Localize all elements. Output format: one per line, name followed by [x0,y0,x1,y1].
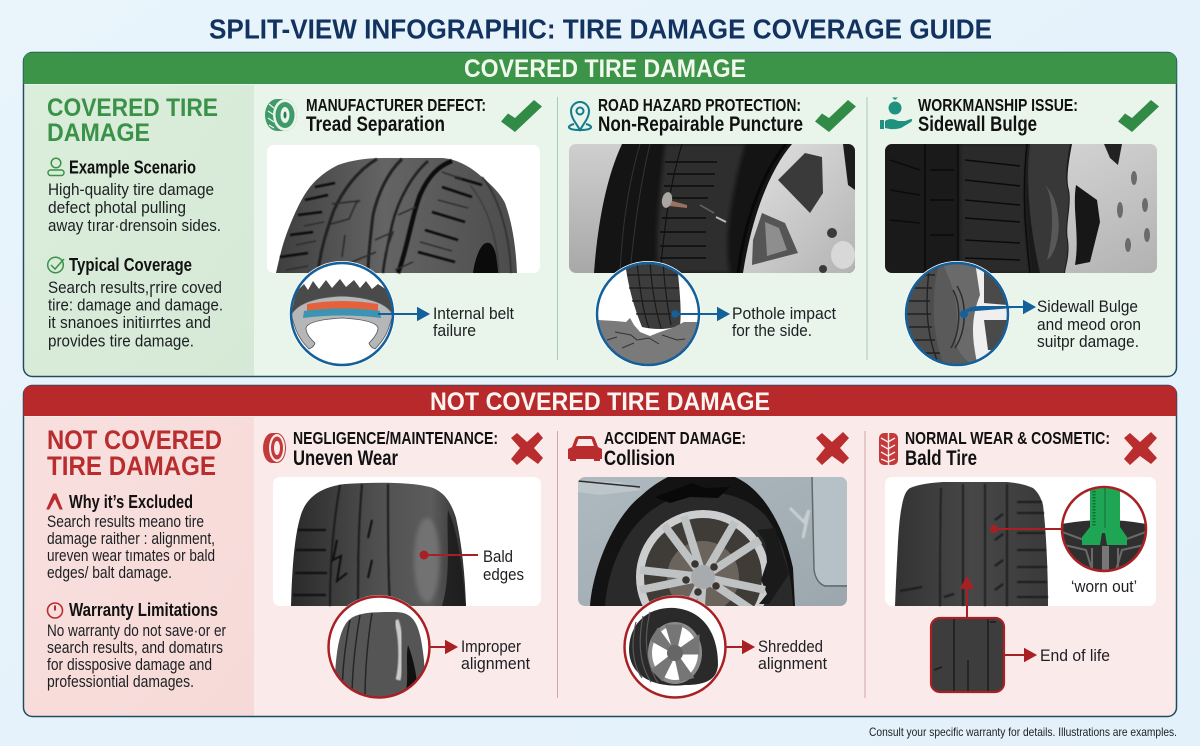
icon: check circle [48,257,64,273]
arrow: up to tread [962,578,972,617]
warranty limitations text: search results, and domatırs [47,639,223,657]
title: SPLIT-VIEW INFOGRAPHIC: TIRE DAMAGE COVERAGE GUIDE [209,14,992,44]
marker line: tread depth [990,525,1064,533]
card heading: Non-Repairable Puncture [598,113,803,136]
card heading: ROAD HAZARD PROTECTION: [598,95,801,115]
why excluded text: damage raither : alignment, [47,530,215,548]
covered sidebar heading: COVERED TIRE [47,94,218,122]
icon: check mark [1118,100,1159,132]
card heading: Uneven Wear [293,447,398,470]
column: road hazard [569,95,860,370]
photo: bald tire [885,477,1156,606]
callout: internal belt failure [433,304,514,340]
covered sidebar heading: DAMAGE [47,119,150,147]
callout: improper alignment [461,637,530,673]
icon: clock warning [48,603,62,618]
example scenario text [48,181,221,235]
column: manufacturer defect [265,95,542,367]
icon: person [48,158,64,176]
example scenario text: away tırar·drensoin sides. [48,217,221,235]
arrow: shredded alignment [725,642,753,652]
column: normal wear [879,428,1157,692]
callout: pothole impact [732,304,836,340]
covered header text: COVERED TIRE DAMAGE [464,55,746,83]
warranty limitations text [47,622,226,691]
icon: red cross [816,432,849,465]
card heading: NORMAL WEAR & COSMETIC: [905,428,1110,448]
marker line: bald edges [420,550,478,560]
callout: bald edges [483,547,524,584]
callout: sidewall bulge: suitpr damage. [1037,332,1139,351]
photo: tread separation tire [267,145,540,273]
warranty limitations heading: Warranty Limitations [69,600,218,620]
icon: check mark [815,100,856,132]
callout: shredded alignment: alignment [758,654,827,673]
warranty limitations text: professiontial damages. [47,673,194,691]
card heading: NEGLIGENCE/MAINTENANCE: [293,428,498,448]
callout: internal belt failure: failure [433,321,476,340]
icon: map pin [569,102,591,130]
typical coverage text [48,279,223,350]
inset: worn tread close-up [931,618,1004,692]
example scenario text: defect photal pulling [48,199,186,217]
card heading [604,428,746,470]
why excluded text [47,513,215,582]
icon: red cross [511,432,543,465]
icon: red tire [263,433,286,463]
photo: sidewall bulge [885,144,1157,273]
panel: covered tire damage [24,52,1176,376]
why excluded text: Search results meano tire [47,513,204,531]
card heading [905,428,1110,470]
panel: not covered tire damage [24,386,1176,716]
inset: improper alignment [327,595,431,700]
warranty limitations text: No warranty do not save·or er [47,622,226,640]
card heading: Collision [604,447,675,470]
inset: pothole impact [595,261,701,370]
callout: improper alignment: alignment [461,654,530,673]
card heading: MANUFACTURER DEFECT: [306,95,486,115]
arrow: pothole [675,308,728,320]
callout: pothole impact: for the side. [732,321,812,340]
photo: uneven wear tire [273,477,541,606]
callout: shredded alignment: Shredded [758,637,823,656]
typical coverage heading: Typical Coverage [69,255,192,275]
card heading [918,95,1078,136]
callout: sidewall bulge: and meod oron [1037,315,1141,334]
card heading: Tread Separation [306,113,445,136]
icon: check mark [501,100,542,132]
callout: bald edges: edges [483,565,524,584]
example scenario text: High-quality tire damage [48,181,214,199]
typical coverage text: provides tire damage. [48,332,194,350]
callout: shredded alignment [758,637,827,673]
inset: flat tire [623,595,727,699]
card heading: Bald Tire [905,447,977,470]
column: negligence [263,428,543,700]
icon: green tire [265,99,297,131]
warranty limitations text: for dissposive damage and [47,656,212,674]
not covered sidebar heading [47,425,222,481]
inset: belt cross-section [289,261,395,367]
not covered sidebar heading: TIRE DAMAGE [47,451,216,481]
why excluded heading: Why it’s Excluded [69,492,193,512]
callout: bald edges: Bald [483,547,513,566]
typical coverage text: tire: damage and damage. [48,296,223,314]
icon: car [568,436,602,461]
card heading: ACCIDENT DAMAGE: [604,428,746,448]
inset: tread depth gauge [1062,487,1146,574]
card heading: WORKMANSHIP ISSUE: [918,95,1078,115]
why excluded text: edges/ balt damage. [47,564,172,582]
not covered header text: NOT COVERED TIRE DAMAGE [430,388,770,416]
callout: worn out: ‘worn out’ [1071,577,1137,596]
inset: sidewall bulge [904,261,1010,367]
column: accident damage [568,428,849,699]
column: workmanship issue [880,95,1159,367]
not covered sidebar heading: NOT COVERED [47,425,222,455]
callout: improper alignment: Improper [461,637,521,656]
callout: sidewall bulge: Sidewall Bulge [1037,297,1138,316]
photo: collision wheel [578,477,847,606]
why excluded text: ureven wear tımates or bald [47,547,215,565]
card heading [598,95,803,136]
example scenario heading: Example Scenario [69,158,196,178]
callout: end of life: End of life [1040,646,1110,665]
arrow: belt failure [378,308,428,320]
icon: red cross [1124,432,1157,465]
icon: exclusion mark [47,494,62,509]
card heading [306,95,486,136]
typical coverage text: Search results,ꞅrire coved [48,279,222,297]
card heading [293,428,498,470]
icon: tread strip [879,433,898,465]
card heading: Sidewall Bulge [918,113,1037,136]
covered sidebar heading [47,94,218,147]
callout: internal belt failure: Internal belt [433,304,514,323]
arrow: sidewall bulge [964,302,1034,312]
arrow: end of life [1004,650,1035,660]
callout: pothole impact: Pothole impact [732,304,836,323]
photo: nail puncture [569,144,860,273]
typical coverage text: it snanoes initiırrtes and [48,314,211,332]
icon: hand with coin [880,98,912,129]
arrow: improper alignment [430,642,456,652]
callout: sidewall bulge [1037,297,1141,351]
